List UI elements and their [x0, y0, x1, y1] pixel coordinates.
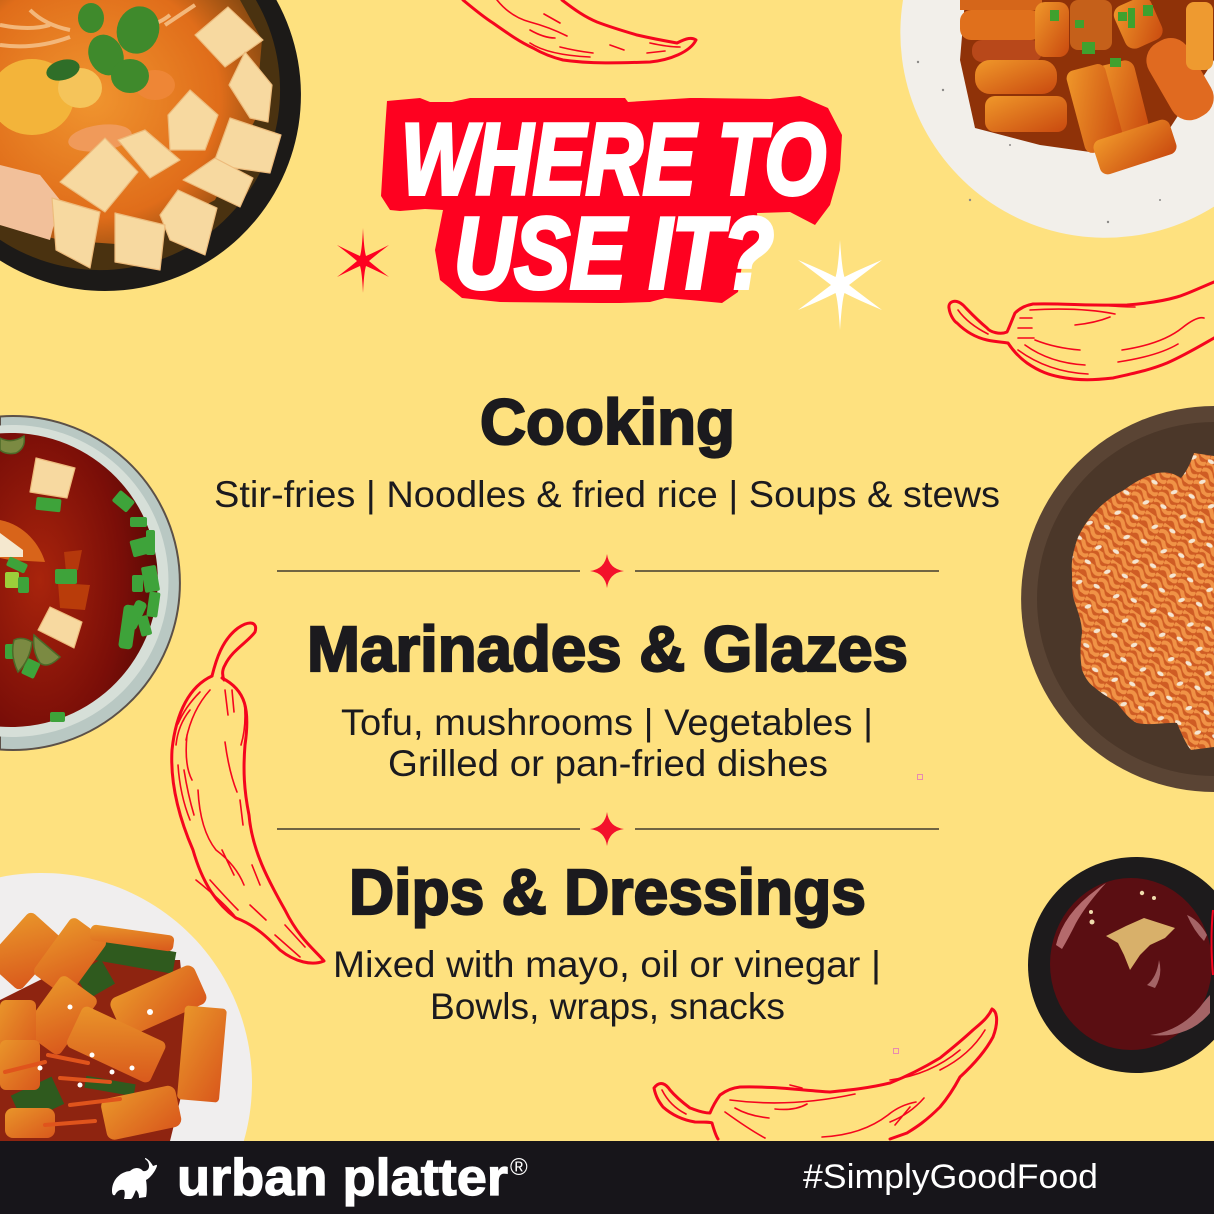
brand name: urban platter	[177, 1149, 508, 1207]
text: marinades uses	[341, 702, 873, 784]
text: marinades uses: Grilled or pan-fried dishes	[388, 743, 828, 784]
chili outline: large centre-left	[172, 623, 324, 963]
text: dips uses: Bowls, wraps, snacks	[430, 986, 785, 1027]
chili outline: right	[949, 282, 1214, 380]
section: cooking	[214, 386, 1000, 515]
footer bar	[0, 1141, 1214, 1214]
heading: marinades and glazes: Marinades & Glazes	[307, 613, 908, 685]
sparkle: white	[798, 240, 882, 330]
photo: tofu stew bowl	[0, 0, 301, 291]
title text: WHERE TO	[401, 104, 826, 216]
photo: tteokbokki plate	[900, 0, 1214, 238]
photo: spicy noodle bowl	[1021, 406, 1214, 792]
badge background	[381, 96, 842, 303]
title badge: USE IT?	[454, 198, 774, 310]
icon: elephant logo	[112, 1158, 157, 1199]
photo: gochujang sauce bowl	[1028, 857, 1214, 1073]
chili outline: top	[463, 0, 696, 63]
sparkle: red	[337, 228, 389, 293]
registered mark: ®	[510, 1154, 528, 1181]
chili outline: bottom	[654, 1009, 997, 1139]
divider 2	[277, 812, 939, 846]
text: cooking uses: Stir-fries | Noodles & fried rice | Soups & stews	[214, 474, 1000, 515]
photo: kimchi cucumber plate	[0, 873, 252, 1141]
photo: miso soup bowl	[0, 416, 180, 750]
heading: cooking: Cooking	[480, 386, 735, 458]
text: dips uses	[333, 944, 881, 1027]
heading: dips and dressings: Dips & Dressings	[349, 856, 866, 928]
section: dips and dressings	[333, 856, 881, 1027]
text: dips uses: Mixed with mayo, oil or vinegar |	[333, 944, 881, 985]
divider 1	[277, 554, 939, 588]
title badge	[381, 96, 842, 310]
section: marinades and glazes	[307, 613, 908, 784]
text: marinades uses: Tofu, mushrooms | Vegetables |	[341, 702, 873, 743]
hashtag: #SimplyGoodFood	[803, 1158, 1098, 1196]
